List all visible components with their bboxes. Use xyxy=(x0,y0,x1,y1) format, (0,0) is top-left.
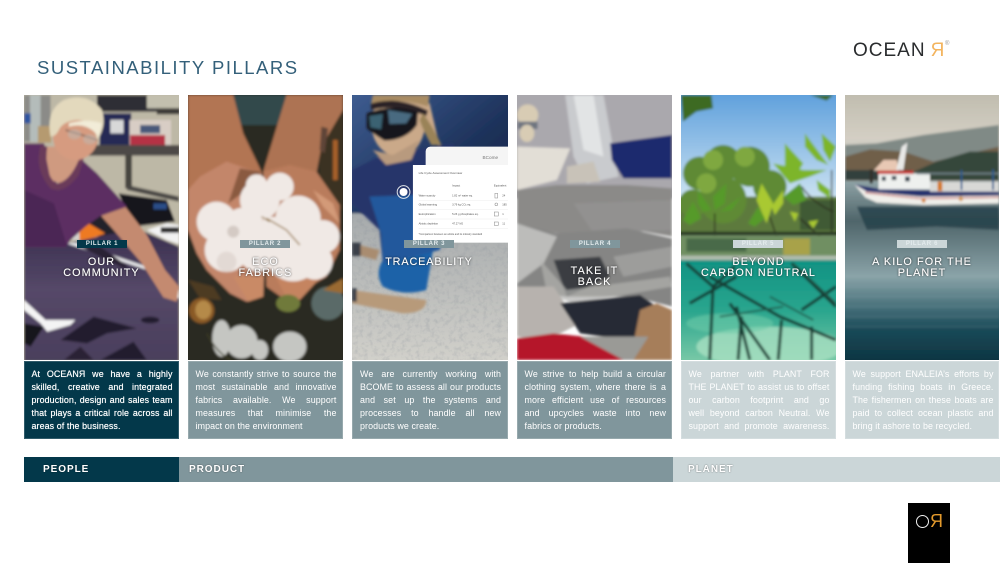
tag: pillar 1 xyxy=(77,240,127,248)
photo: diver with life cycle assessment card: 24 xyxy=(502,193,506,197)
text box: traceability description: We are currently working with xyxy=(360,369,501,379)
heading: eco fabrics: ECO xyxy=(252,256,279,268)
text box: community description: that plays a critical role across all xyxy=(32,408,172,418)
bar: planet: PLANET xyxy=(688,464,734,475)
photo: diver with life cycle assessment card: Impact xyxy=(452,183,460,187)
photo: diver with life cycle assessment card: 1 xyxy=(502,212,504,216)
photo: diver with life cycle assessment card: Global warming xyxy=(419,203,438,207)
text box: traceability description: and set up the systems and xyxy=(360,395,501,405)
photo: diver with life cycle assessment card: Eutrophication xyxy=(419,212,436,216)
photo: diver with life cycle assessment card: *Comparison between an article and its industry standard xyxy=(419,233,483,236)
text box: fabrics description xyxy=(188,361,343,439)
text box: kilo description: bring it ashore to be recycled. xyxy=(852,421,972,431)
photo: diver with life cycle assessment card: BCome xyxy=(483,155,499,160)
heading: take it back: TAKE IT xyxy=(571,265,618,277)
text box: kilo description: The fishermen on these boats are xyxy=(852,395,994,405)
text box: community description: At OCEANЯ we have a highly xyxy=(32,369,172,379)
photo: diver with life cycle assessment card: Water scarcity xyxy=(419,193,436,197)
panel: pillar 4 take it back xyxy=(517,95,672,439)
text box: traceability description: products we create. xyxy=(360,421,439,431)
panel: pillar 1 our community xyxy=(24,95,179,439)
panel: pillar 5 beyond carbon neutral xyxy=(681,95,836,439)
bar: product: PRODUCT xyxy=(189,464,245,475)
panel: pillar 6 a kilo for the planet xyxy=(845,95,999,439)
text box: carbon description xyxy=(681,361,836,439)
heading: take it back xyxy=(570,265,618,288)
text box: kilo description: We support ENALEIA’s efforts by xyxy=(852,369,994,379)
text box: kilo description xyxy=(845,361,999,439)
text box: take back description: We strive to help build a circular xyxy=(524,369,666,379)
tag: pillar 5: PILLAR 5 xyxy=(742,241,774,247)
heading: beyond carbon neutral: CARBON NEUTRAL xyxy=(701,267,816,279)
title: SUSTAINABILITY PILLARS xyxy=(37,57,299,78)
tag: pillar 3 xyxy=(404,240,454,248)
photo: diver with life cycle assessment card: 1.82 m³ water eq. xyxy=(452,193,473,197)
text box: take back description: fabrics or products. xyxy=(524,421,602,431)
text box: traceability description: BCOME to assess all our products xyxy=(360,382,501,392)
text box: fabrics description: measures that minimise the xyxy=(196,408,336,418)
text box: take back description: and upcycles waste into new xyxy=(524,408,666,418)
text box: kilo description: funding fishing boats in Greece. xyxy=(852,382,994,392)
tag: pillar 3: PILLAR 3 xyxy=(413,241,445,247)
text box: take back description: more efficient use of resources xyxy=(524,395,666,405)
photo: woman cutting fabric xyxy=(24,95,179,360)
logo: black OR badge: Я xyxy=(930,511,943,531)
photo: diver with life cycle assessment card: 5.23 g phosphates eq. xyxy=(452,212,479,216)
text box: take back description xyxy=(517,361,672,439)
photo: clothes in plastic bags xyxy=(517,95,672,360)
text box: take back description: clothing system, where there is a xyxy=(524,382,666,392)
tag: pillar 2: PILLAR 2 xyxy=(249,241,281,247)
heading: our community: OUR xyxy=(88,256,115,268)
text box: fabrics description: impact on the environment xyxy=(196,421,303,431)
text box: fabrics description: fabrics available. We support xyxy=(196,395,336,405)
photo: fishing boat on sea xyxy=(845,95,999,360)
bar: planet xyxy=(673,457,1000,482)
heading: a kilo for the planet xyxy=(871,256,972,279)
heading: a kilo for the planet: PLANET xyxy=(898,267,946,279)
text box: carbon description: support and promote awareness. xyxy=(688,421,830,431)
photo: diver with life cycle assessment card: Life Cycle Assessment Overview xyxy=(419,171,463,175)
photo: diver with life cycle assessment card: Abiotic depletion xyxy=(419,221,439,225)
text box: carbon description: our carbon footprint and go xyxy=(688,395,830,405)
text box: community description: skilled, creative and integrated xyxy=(32,382,172,392)
photo: diver with life cycle assessment card: 185 xyxy=(502,203,507,207)
heading: our community: COMMUNITY xyxy=(63,267,140,279)
text box: kilo description: paid to collect ocean plastic and xyxy=(852,408,994,418)
photo: diver with life cycle assessment card xyxy=(352,95,508,360)
logo: OCEAN: ® xyxy=(945,41,949,47)
logo: OCEAN: OCEAN Я xyxy=(853,40,945,61)
heading: our community xyxy=(62,256,140,279)
text box: fabrics description: most sustainable and innovative xyxy=(196,382,336,392)
text box: carbon description: THE PLANET to assist us to offset xyxy=(688,382,830,392)
panel: pillar 3 traceability xyxy=(352,95,508,439)
logo: black OR badge xyxy=(908,503,950,563)
photo: diver with life cycle assessment card: Equivalent xyxy=(494,183,507,187)
tag: pillar 6 xyxy=(897,240,947,248)
photo: diver with life cycle assessment card: 47.27 MJ xyxy=(452,221,464,225)
heading: beyond carbon neutral: BEYOND xyxy=(732,256,785,268)
bar: people: PEOPLE xyxy=(43,464,89,475)
text box: fabrics description: We constantly strive to source the xyxy=(196,369,336,379)
photo: diver with life cycle assessment card: 3.79 kg CO₂ eq. xyxy=(452,203,471,207)
text box: community description: production, design and sales team xyxy=(32,395,172,405)
photo: hands holding cotton xyxy=(188,95,343,360)
tag: pillar 5 xyxy=(733,240,783,248)
text box: carbon description: We partner with PLANT FOR xyxy=(688,369,830,379)
text box: traceability description: processes to handle all new xyxy=(360,408,501,418)
tag: pillar 1: PILLAR 1 xyxy=(86,241,118,247)
tag: pillar 6: PILLAR 6 xyxy=(906,241,938,247)
bar: people xyxy=(24,457,179,482)
heading: take it back: BACK xyxy=(578,276,611,288)
heading: eco fabrics: FABRICS xyxy=(239,267,292,279)
panel: pillar 2 eco fabrics xyxy=(188,95,343,439)
tag: pillar 4 xyxy=(570,240,620,248)
photo: diver with life cycle assessment card: 11 xyxy=(502,221,506,225)
heading: a kilo for the planet: A KILO FOR THE xyxy=(872,256,972,268)
tag: pillar 4: PILLAR 4 xyxy=(579,241,611,247)
photo: mangrove above and below water xyxy=(681,95,836,360)
text box: community description xyxy=(24,361,179,439)
heading: traceability: TRACEABILITY xyxy=(385,256,473,268)
text box: carbon description: well beyond carbon Neutral. We xyxy=(688,408,830,418)
heading: beyond carbon neutral xyxy=(700,256,816,279)
text box: traceability description xyxy=(352,361,508,439)
heading: eco fabrics xyxy=(238,256,292,279)
bar: product xyxy=(179,457,673,482)
text box: community description: areas of the business. xyxy=(32,421,121,431)
tag: pillar 2 xyxy=(240,240,290,248)
